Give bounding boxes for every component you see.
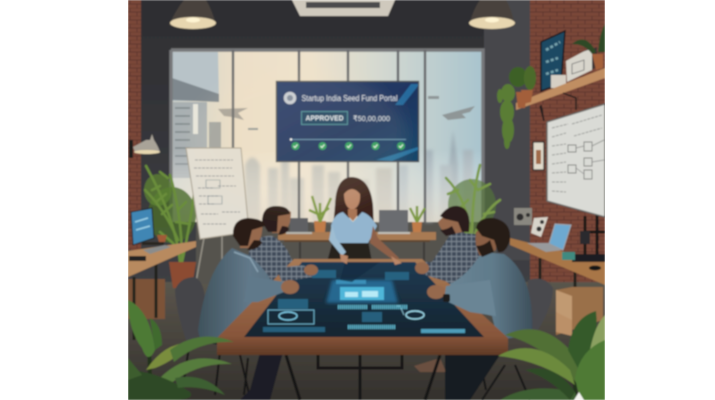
flipchart with diagram	[186, 148, 249, 282]
pendant lamp left	[169, 0, 216, 29]
speaker box	[514, 208, 532, 225]
distant skyline	[245, 130, 473, 222]
funding amount: ₹50,00,000	[353, 114, 390, 123]
white storage box	[551, 47, 597, 88]
chair right	[480, 279, 553, 400]
cardboard box under left desk	[128, 279, 165, 319]
far-left man's forearm and hands	[276, 265, 312, 282]
back laptop right	[378, 210, 410, 234]
back laptop left	[286, 218, 312, 234]
flying vehicles	[218, 96, 475, 130]
left desk with computer	[128, 208, 196, 340]
framed picture	[533, 142, 544, 170]
back wall	[128, 0, 531, 283]
air conditioner	[292, 0, 395, 16]
pendant lamp right	[469, 0, 515, 29]
right desk with equipment	[510, 200, 605, 336]
presenter's reflection	[340, 262, 380, 282]
woman presenter	[327, 177, 399, 262]
portal logo	[284, 92, 296, 104]
man in grey shirt, front left	[198, 218, 292, 400]
holographic glass surface	[244, 262, 484, 337]
front-left man's forearm and hands	[244, 276, 284, 302]
floor	[128, 282, 605, 400]
circular node left	[268, 310, 314, 324]
shelf potted plant	[572, 24, 605, 70]
left arm	[329, 224, 346, 256]
progress timeline	[290, 138, 406, 150]
right whiteboard	[547, 104, 605, 217]
right brick wall	[530, 0, 605, 290]
man in plaid, far left	[248, 206, 312, 282]
forearms and hands resting on the table	[244, 254, 496, 316]
right arm	[370, 226, 399, 262]
computer monitor	[131, 208, 154, 245]
table wood frame	[217, 259, 508, 355]
chair left	[175, 277, 250, 398]
large plant, bottom left	[128, 300, 234, 400]
blouse	[331, 212, 377, 243]
wall lamp	[129, 134, 160, 158]
sky	[170, 50, 482, 222]
large plant, bottom right	[498, 311, 605, 400]
plant behind left desk	[144, 166, 196, 262]
small UI panels	[263, 270, 465, 333]
shelf board	[516, 68, 605, 110]
man in plaid, far right	[414, 206, 481, 372]
warm window light glow	[190, 70, 410, 210]
data bars	[338, 307, 407, 327]
lower wall under window	[196, 222, 496, 284]
window frame	[171, 50, 483, 222]
back table	[278, 196, 436, 262]
wall screen: funding approval	[276, 82, 418, 162]
office scene illustration	[128, 0, 605, 400]
woman's hands	[340, 254, 402, 265]
3D printer	[562, 200, 605, 270]
terracotta pot	[169, 262, 196, 288]
glowing central schematic	[326, 280, 398, 303]
plant by right window	[446, 165, 500, 236]
front-right man's forearm, watch and hands	[444, 280, 496, 316]
framed poster	[541, 31, 565, 91]
white speaker panel	[531, 217, 548, 237]
far-right man's forearm and hands	[422, 262, 452, 282]
portal title: Startup India Seed Fund Portal	[302, 94, 398, 103]
right pillar	[484, 0, 530, 260]
building on left	[172, 52, 221, 178]
conference table	[217, 259, 508, 400]
drawer unit	[556, 287, 603, 336]
window haze	[172, 158, 482, 223]
hanging plant	[497, 66, 536, 149]
table legs	[286, 355, 440, 400]
corner watermark mark	[574, 392, 584, 400]
screen light streaks	[376, 84, 418, 161]
face	[344, 189, 360, 210]
potted plant on back table right	[410, 206, 425, 232]
hair	[333, 177, 374, 228]
wall shelf with decor	[497, 24, 605, 149]
skirt	[327, 240, 372, 262]
laptop	[527, 224, 571, 252]
window with skyline	[170, 50, 483, 222]
screen panel	[276, 82, 418, 162]
left brick column	[128, 0, 141, 250]
man in blue-grey shirt, front right	[436, 218, 532, 400]
circular node right	[396, 306, 424, 319]
potted plant on back table left	[309, 196, 331, 232]
approved badge: APPROVED	[306, 116, 344, 122]
approved badge	[302, 112, 348, 124]
keyboard and devices	[129, 235, 171, 261]
